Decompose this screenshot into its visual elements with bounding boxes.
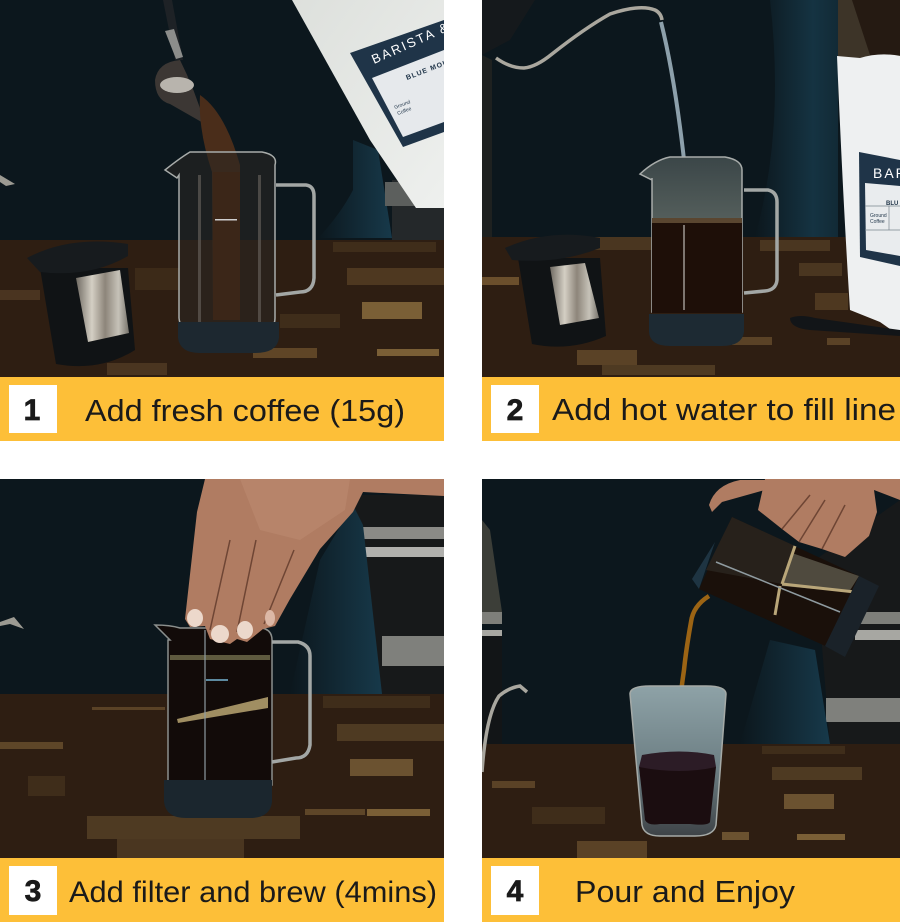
photo: pressing filter [0, 479, 444, 858]
kettle spout [482, 686, 527, 772]
panel: step 1 [0, 0, 452, 441]
glass jug [165, 152, 314, 353]
coffee bag: Coffee [870, 219, 885, 225]
coffee bag: BLUE MOU [405, 59, 450, 82]
banner: step 1: 1 [24, 394, 40, 427]
coffee stream [680, 594, 710, 686]
banner: step 3 [0, 858, 444, 922]
banner: step 4: 4 [507, 875, 524, 908]
coffee bag [292, 0, 452, 208]
glass jug [640, 157, 777, 346]
banner: step 3: 3 [25, 875, 41, 908]
banner: step 4: Pour and Enjoy [575, 874, 796, 909]
coffee bag [837, 54, 900, 336]
filter lid [505, 235, 606, 347]
banner: step 2: 2 [507, 394, 523, 427]
banner: step 2 [482, 377, 900, 441]
kettle and spout [482, 0, 662, 68]
photo: adding water [482, 0, 900, 377]
water stream [661, 22, 686, 178]
french press [155, 625, 310, 818]
hand [709, 479, 900, 557]
pouring grounds [200, 95, 240, 272]
hand on plunger [185, 479, 444, 644]
coffee bag: BARISTA & [369, 19, 452, 67]
scoop [155, 0, 205, 124]
panel: step 3 [0, 479, 444, 922]
panel: step 4 [482, 479, 900, 922]
french press tilted [692, 517, 879, 657]
coffee bag: BLU [886, 201, 898, 207]
side kettle tip [0, 617, 24, 629]
banner: step 1 [0, 377, 444, 441]
glass [630, 686, 726, 836]
filter lid [27, 241, 135, 366]
side kettle tip [0, 175, 15, 186]
photo: pouring coffee [482, 479, 900, 858]
spoon on table [790, 316, 900, 336]
banner: step 1: Add fresh coffee (15g) [85, 393, 405, 428]
coffee bag: Coffee [397, 106, 413, 117]
banner: step 3: Add filter and brew (4mins) [69, 876, 437, 909]
photo: adding coffee [0, 0, 452, 377]
banner: step 2: Add hot water to fill line [552, 392, 896, 427]
panel: step 2 [482, 0, 900, 441]
coffee bag: Ground [394, 99, 411, 111]
banner: step 4 [482, 858, 900, 922]
coffee bag: Ground [870, 213, 887, 219]
